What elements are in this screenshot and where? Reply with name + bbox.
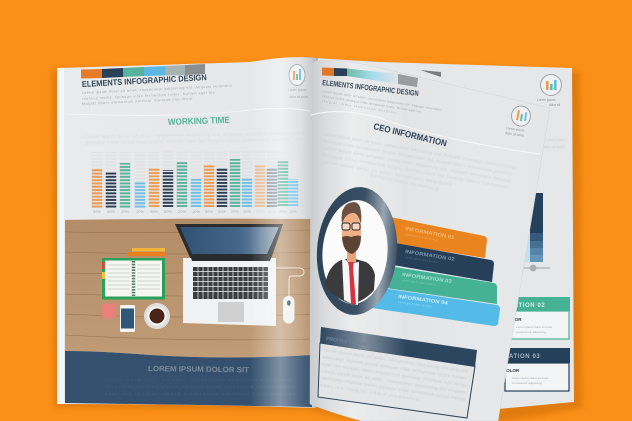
ribbon: information 04: Lorem ipsum dolor sit amet: [398, 300, 432, 308]
ribbon: information 01: INFORMATION 01: [405, 226, 455, 241]
bar chart value labels: 30%: [93, 209, 101, 214]
bar chart value labels: 10%: [243, 209, 251, 214]
working time description: Lorem ipsum dolor sit amet, consectetur adipiscing elit. Aliquam venenatis rhoncus mollis.: [85, 131, 307, 139]
bar chart: working time: [97, 151, 293, 208]
book shadow: [52, 62, 582, 421]
profile box text: [320, 347, 469, 402]
left page intro text: feugiat libero elementum porttitor tristique non tortor.: [82, 97, 194, 106]
front page intro text: rhoncus mollis. Quisque vitae fermentum turpis. Nullam eget leo: [322, 94, 421, 114]
footer text: [105, 377, 296, 396]
bar chart value labels: 20%: [279, 209, 287, 214]
profile box text: eget leo feugiat libero elementum porttitor tristique non tortor: [322, 361, 468, 388]
information ribbons: [372, 217, 500, 326]
bar chart value labels: 20%: [231, 209, 239, 214]
heading: working time: WORKING TIME: [168, 115, 230, 127]
icon: left page chart badge: [289, 64, 305, 86]
bar chart value labels: 30%: [150, 209, 158, 214]
panel: back page information 03: DOLOR: [503, 368, 520, 373]
footer text: Lorem ipsum dolor sit amet, consectetur adipiscing elit aliquam: [105, 377, 296, 382]
section divider: [65, 108, 314, 115]
bar chart value labels: 50%: [107, 209, 115, 214]
bar chart value labels: 30%: [205, 209, 213, 214]
heading: CEO information: CEO INFORMATION: [373, 121, 448, 148]
profile box text: Lorem ipsum dolor sit amet, consectetur adipiscing elit aliquam: [321, 368, 467, 395]
left page intro text: rhoncus mollis. Quisque vitae fermentum turpis. Nullam eget leo: [82, 91, 215, 101]
left page intro text: [82, 84, 232, 106]
icon: mouse with cable: [276, 268, 304, 324]
footer text: venenatis rhoncus mollis quisque vitae fermentum turpis nullam: [105, 384, 296, 389]
profile box text: venenatis rhoncus mollis quisque vitae fermentum turpis nullam: [321, 375, 467, 402]
orange bars: [97, 165, 209, 208]
profile box text: Lorem ipsum dolor sit amet, consectetur adipiscing elit aliquam: [323, 347, 469, 374]
bar chart value labels: 30%: [256, 209, 264, 214]
panel: back page information 03: Lorem ipsum dolor sit amet: [512, 376, 548, 380]
back page vertical stacked bar: [521, 193, 543, 262]
back page icon caption: [537, 98, 560, 107]
back right page: [316, 58, 574, 409]
front page icon caption: [505, 126, 525, 138]
laptop keyboard: [193, 267, 268, 299]
bar chart value labels: 50%: [164, 209, 172, 214]
ribbon: information 02: Lorem ipsum dolor sit amet: [405, 255, 439, 264]
ribbon: information 02: [393, 243, 494, 282]
icon: smartphone: [120, 305, 135, 332]
working time description: Quisque vitae fermentum turpis. Nullam eget leo feugiat libero elementum porttitor amet.: [85, 137, 307, 145]
panel: back page information 02: LOR: [512, 317, 522, 322]
header colour strip: [322, 68, 441, 87]
icon: back page chart badge: [540, 74, 562, 96]
left page title: ELEMENTS INFOGRAPHIC DESIGN: [82, 72, 207, 89]
ribbon: information 02: INFORMATION 02: [405, 249, 455, 263]
ribbon: information 04: INFORMATION 04: [398, 294, 448, 307]
bar chart value labels: 20%: [178, 209, 186, 214]
profile header label: PROFILE REPORT: [326, 336, 370, 348]
ribbon: information 03: [386, 267, 497, 304]
profile box text: eget leo feugiat libero elementum: [320, 382, 420, 402]
front right page: [310, 60, 550, 421]
navy footer band: [65, 351, 312, 407]
footer heading: LOREM IPSUM DOLOR SIT: [148, 364, 249, 374]
back page description text: Lorem ipsum: [545, 138, 566, 142]
back page description text: dolor sit amet: [543, 145, 565, 149]
panel: back page information 03: consectetur adipiscing: [512, 381, 542, 385]
CEO portrait: [313, 184, 401, 318]
ribbon: information 03: INFORMATION 03: [402, 272, 452, 285]
bar chart value labels: 50%: [268, 209, 276, 214]
icon: front page chart badge: [512, 106, 530, 126]
back page icon caption: Lorem ipsum: [537, 98, 556, 102]
footer text: eget leo feugiat libero elementum porttitor tristique non: [105, 391, 295, 396]
bar chart value labels: 50%: [218, 209, 226, 214]
icon: laptop: [175, 224, 283, 326]
panel: back page information 02: consectetur adipiscing: [516, 330, 546, 334]
icon: coffee cup: [144, 303, 170, 329]
icon: sticky note: [101, 303, 116, 319]
CEO description text: Quisque vitae fermentum turpis. Nullam eget leo feugiat libero elementum porttitor: [323, 138, 513, 176]
back page description text: [543, 138, 566, 149]
CEO description text: [323, 131, 516, 192]
navy bars: [111, 168, 222, 208]
ribbon: information 01: Lorem ipsum dolor sit amet: [405, 232, 439, 242]
front page icon caption: Lorem ipsum: [506, 126, 525, 133]
profile box text: venenatis rhoncus mollis quisque vitae fermentum turpis nullam: [322, 354, 468, 381]
section divider: [311, 112, 540, 154]
working time description: [85, 131, 307, 145]
CEO description text: Lorem ipsum dolor sit amet, consectetur adipiscing elit. Aliquam venenatis rhoncus mollis: [323, 131, 516, 170]
laptop trackpad: [218, 302, 244, 322]
panel: back page information 02: Lorem ipsum dolor sit amet: [516, 325, 552, 329]
wood plank lines: [65, 230, 312, 340]
ribbon: information 01: [390, 217, 487, 258]
bar chart value labels: [93, 209, 297, 214]
front page title: ELEMENTS INFOGRAPHIC DESIGN: [322, 78, 419, 98]
CEO description text: Quisque vitae fermentum: [370, 172, 440, 192]
ribbon: information 03: Lorem ipsum dolor sit amet: [402, 278, 436, 287]
panel: back page information 02: ATION 02: [514, 303, 545, 309]
icon: pencils: [127, 248, 165, 256]
portrait ring: [313, 184, 401, 318]
profile box header: [320, 327, 477, 367]
ribbon: information 04: [372, 288, 500, 326]
profile box outline: [318, 343, 475, 418]
bar chart value labels: 20%: [121, 209, 129, 214]
faded bars: [260, 165, 272, 207]
header colour strip: [81, 64, 205, 78]
front page icon caption: dolor sit amet: [505, 131, 524, 138]
left page icon caption: dolor sit amet: [289, 95, 308, 99]
left page: [57, 57, 318, 408]
teal bars: [125, 159, 283, 208]
icon: notebook: [102, 258, 165, 300]
bar chart value labels: 10%: [289, 209, 297, 214]
CEO description text: Lorem ipsum dolor sit amet, consectetur adipiscing: [323, 159, 452, 187]
front page intro text: Lorem ipsum dolor sit amet, consectetur adipiscing elit. Aliquam venenatis: [322, 89, 441, 112]
panel: profile box: [318, 327, 477, 418]
left page icon caption: [288, 88, 308, 99]
chart background lines: [97, 151, 293, 206]
CEO description text: Lorem ipsum dolor sit amet, consectetur adipiscing elit. Aliquam venenatis rhoncus: [323, 145, 511, 183]
desk illustration: [65, 219, 312, 358]
bar chart value labels: 10%: [136, 209, 144, 214]
blue bars: [140, 178, 293, 208]
CEO description text: Quisque vitae fermentum turpis. Nullam eget leo feugiat libero elementum: [323, 152, 509, 190]
figure: man in suit: [325, 202, 375, 305]
bar chart value labels: 10%: [192, 209, 200, 214]
panel: back page information 02: [510, 297, 570, 339]
panel: back page information 03: [503, 348, 570, 391]
back page icon caption: dolor sit: [549, 103, 560, 107]
portrait background: [319, 198, 391, 306]
page fold highlight: [250, 57, 318, 408]
left page icon caption: Lorem ipsum: [288, 88, 307, 92]
back page slider: [520, 265, 550, 271]
panel: back page information 03: ATION 03: [509, 354, 540, 360]
front page intro text: feugiat libero elementum porttitor: [322, 99, 397, 115]
left page intro text: Lorem ipsum dolor sit amet, consectetur adipiscing elit. Aliquam venenatis: [82, 84, 232, 95]
